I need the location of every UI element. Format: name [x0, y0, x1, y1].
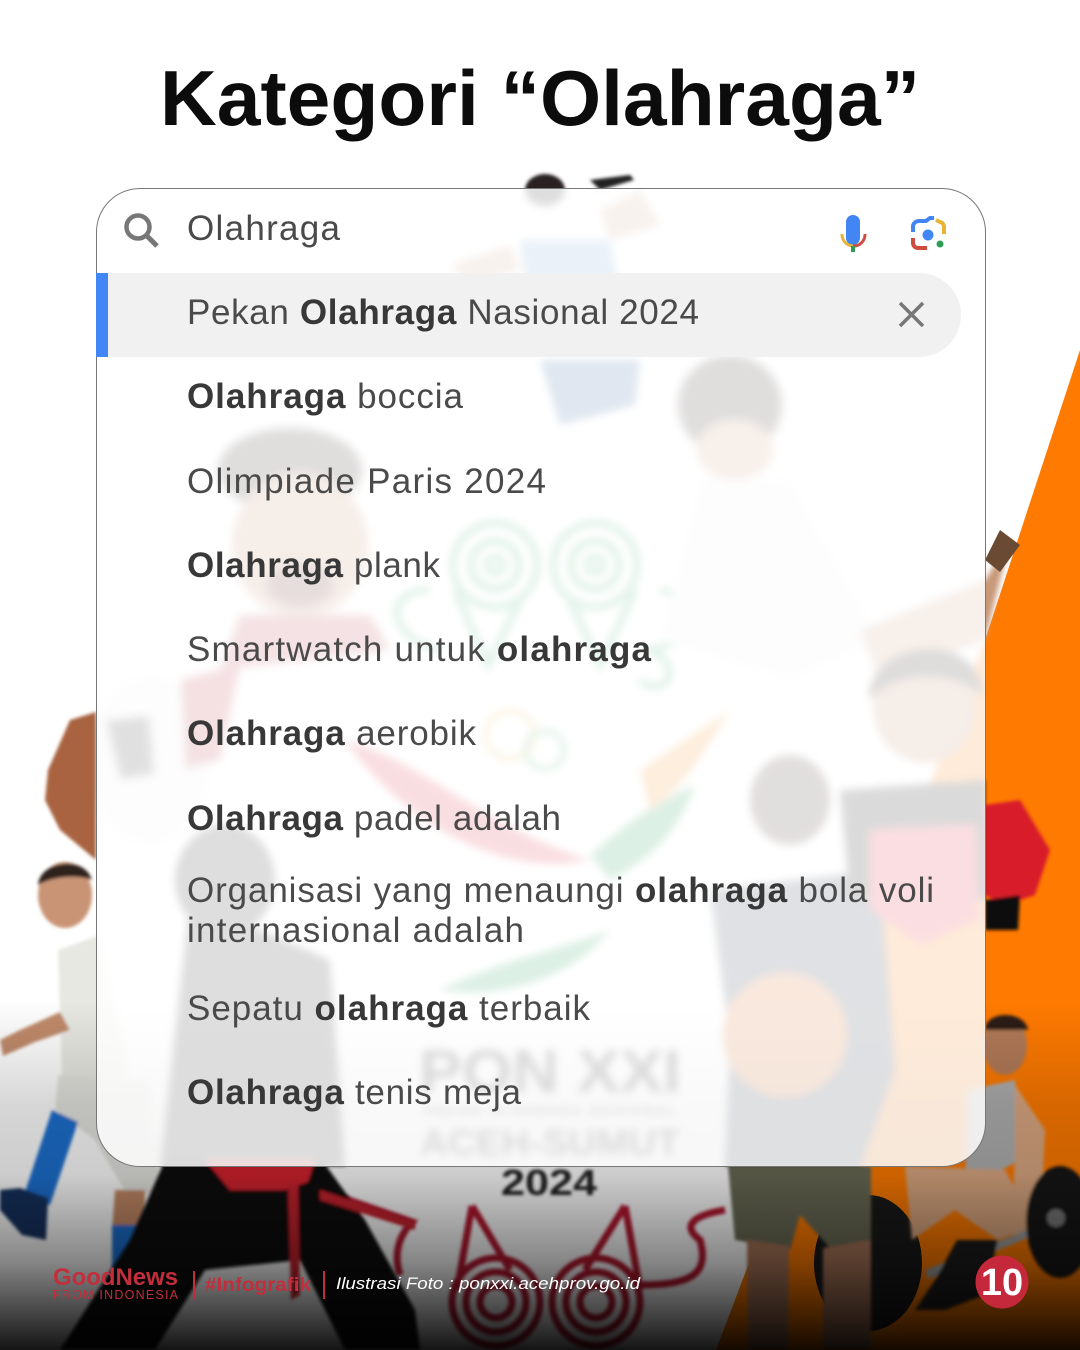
page number badge	[976, 1256, 1028, 1308]
footer divider	[193, 1271, 195, 1299]
athlete: shouting soccer player	[88, 428, 390, 845]
bottom dark gradient	[0, 1000, 1080, 1350]
title: Kategori “Olahraga”	[160, 54, 920, 142]
suggestion: Pekan Olahraga Nasional 2024: Pekan Olahraga Nasional 2024	[187, 293, 699, 332]
logo swooshes	[345, 740, 590, 864]
suggestion: Organisasi yang menaungi olahraga bola voli internasional adalah: Organisasi yang menaungi olahraga bola voli	[187, 871, 934, 910]
barbell plate left	[814, 1195, 922, 1331]
footer brand: GoodNews: GoodNews	[53, 1264, 178, 1291]
logo wordmark	[419, 1038, 681, 1203]
logo spirals green	[397, 523, 693, 687]
suggestion: Olahraga boccia: Olahraga boccia	[187, 377, 464, 416]
suggestion: Olahraga aerobik: Olahraga aerobik	[187, 714, 476, 753]
athlete: badminton player	[450, 174, 660, 425]
suggestion: Sepatu olahraga terbaik: Sepatu olahraga terbaik	[187, 989, 590, 1028]
panel: search box	[96, 188, 986, 1167]
athlete: boy with basketball	[710, 755, 895, 1350]
suggestion: Olahraga plank: Olahraga plank	[187, 546, 440, 585]
blue selection bar	[96, 273, 108, 357]
icon: microphone	[842, 215, 865, 252]
page number badge: 10	[981, 1262, 1023, 1304]
athlete: martial artist	[60, 825, 420, 1350]
suggestion: Olimpiade Paris 2024: Olimpiade Paris 2024	[187, 462, 546, 501]
icon: close	[900, 303, 923, 326]
logo wordmark: 2024	[501, 1162, 597, 1203]
photo credit: Ilustrasi Foto : ponxxi.acehprov.go.id	[336, 1274, 641, 1293]
glove hand right	[985, 530, 1020, 572]
footer brand: GoodNews: FROM INDONESIA	[53, 1288, 179, 1302]
suggestion: Olahraga padel adalah: Olahraga padel adalah	[187, 799, 561, 838]
suggestion: Organisasi yang menaungi olahraga bola voli internasional adalah: internasional adalah	[187, 911, 524, 950]
orange diagonal backdrop	[716, 350, 1080, 1350]
icon: camera lens	[913, 218, 944, 248]
athlete: karate boy	[660, 355, 1010, 680]
footer tag: #Infografik	[205, 1275, 311, 1296]
search query text: Olahraga	[187, 209, 341, 248]
footer divider	[323, 1271, 325, 1299]
athlete: boxer arm left	[45, 712, 96, 860]
logo rings	[486, 711, 564, 769]
logo red ornaments	[325, 1192, 725, 1346]
icon: search magnifier	[126, 216, 157, 246]
event logo	[325, 523, 730, 1346]
athlete: weightlifter	[905, 1015, 1080, 1310]
athlete: young boxer	[840, 647, 1050, 945]
suggestion: Smartwatch untuk olahraga: Smartwatch untuk olahraga	[187, 630, 652, 669]
athlete: footballer left	[0, 862, 160, 1290]
logo wordmark: PEKAN OLAHRAGA NASIONAL	[425, 1103, 675, 1118]
logo wordmark: ACEH-SUMUT	[420, 1122, 680, 1163]
suggestion: Organisasi yang menaungi olahraga bola voli internasional adalah	[187, 871, 934, 950]
suggestion: Olahraga tenis meja: Olahraga tenis meja	[187, 1073, 522, 1112]
logo wordmark: PON XXI	[419, 1038, 681, 1105]
highlighted suggestion row	[96, 273, 961, 357]
